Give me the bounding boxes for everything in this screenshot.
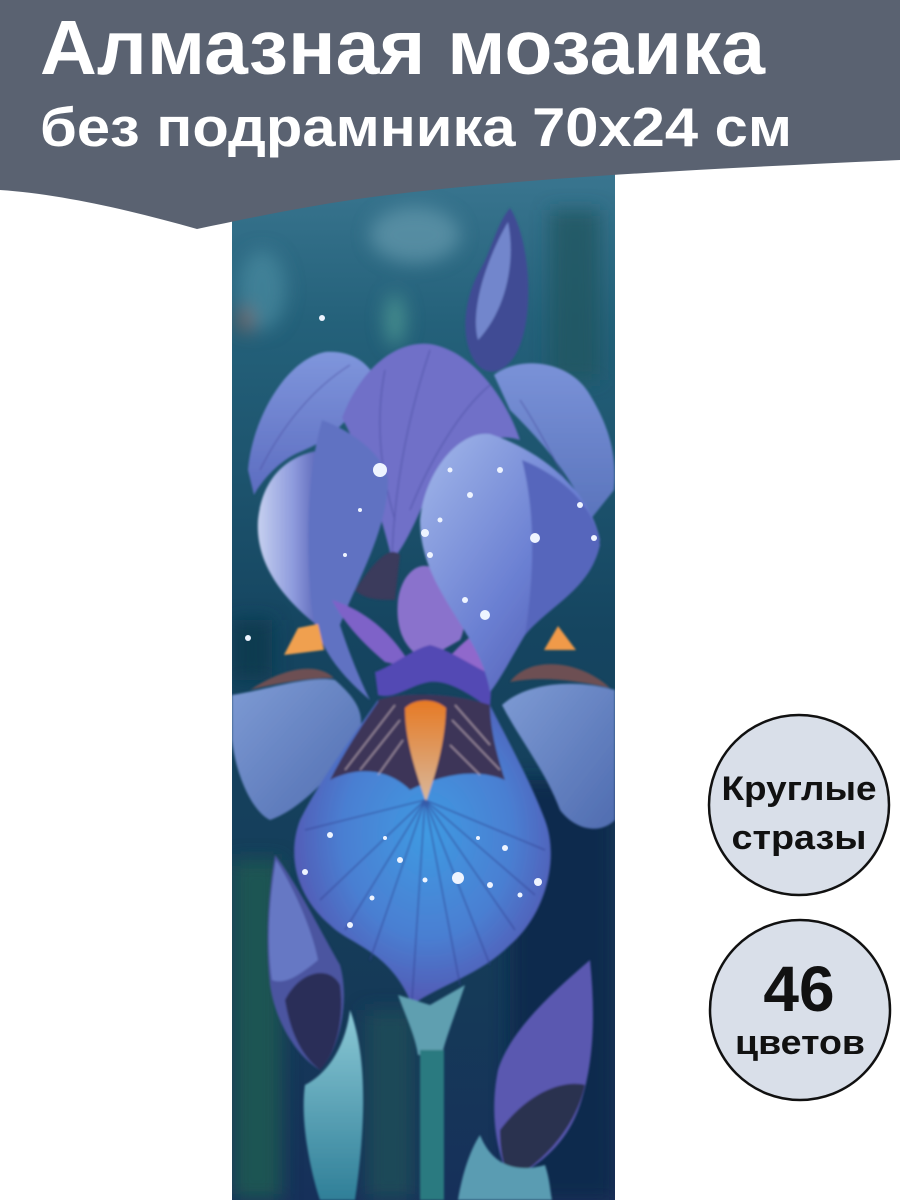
left inner petal bbox=[258, 420, 400, 700]
orange stamens bbox=[284, 624, 576, 655]
water droplets bbox=[245, 315, 597, 928]
subtitle: без подрамника 70х24 см bbox=[40, 96, 792, 158]
centre petals bbox=[332, 566, 498, 708]
lower right bud bbox=[458, 960, 593, 1200]
top bud bbox=[465, 208, 528, 372]
right standard petal bbox=[420, 434, 600, 692]
badge: round rhinestones: Круглые bbox=[722, 770, 876, 808]
lower left bud bbox=[268, 855, 363, 1200]
badge: 46 colours: 46 bbox=[763, 953, 835, 1025]
badge: round rhinestones: стразы bbox=[732, 819, 866, 857]
upper petals bbox=[248, 344, 615, 560]
stem bbox=[398, 985, 465, 1200]
badge: 46 colours: цветов bbox=[735, 1024, 865, 1062]
illustration: blue iris flower bbox=[232, 170, 615, 1200]
main lower fall petal bbox=[294, 695, 551, 1005]
badge: 46 colours bbox=[710, 920, 890, 1100]
side falls bbox=[232, 664, 615, 829]
header banner bbox=[0, 0, 900, 229]
badge: round rhinestones bbox=[709, 715, 889, 895]
title: Алмазная мозаика bbox=[40, 5, 766, 91]
